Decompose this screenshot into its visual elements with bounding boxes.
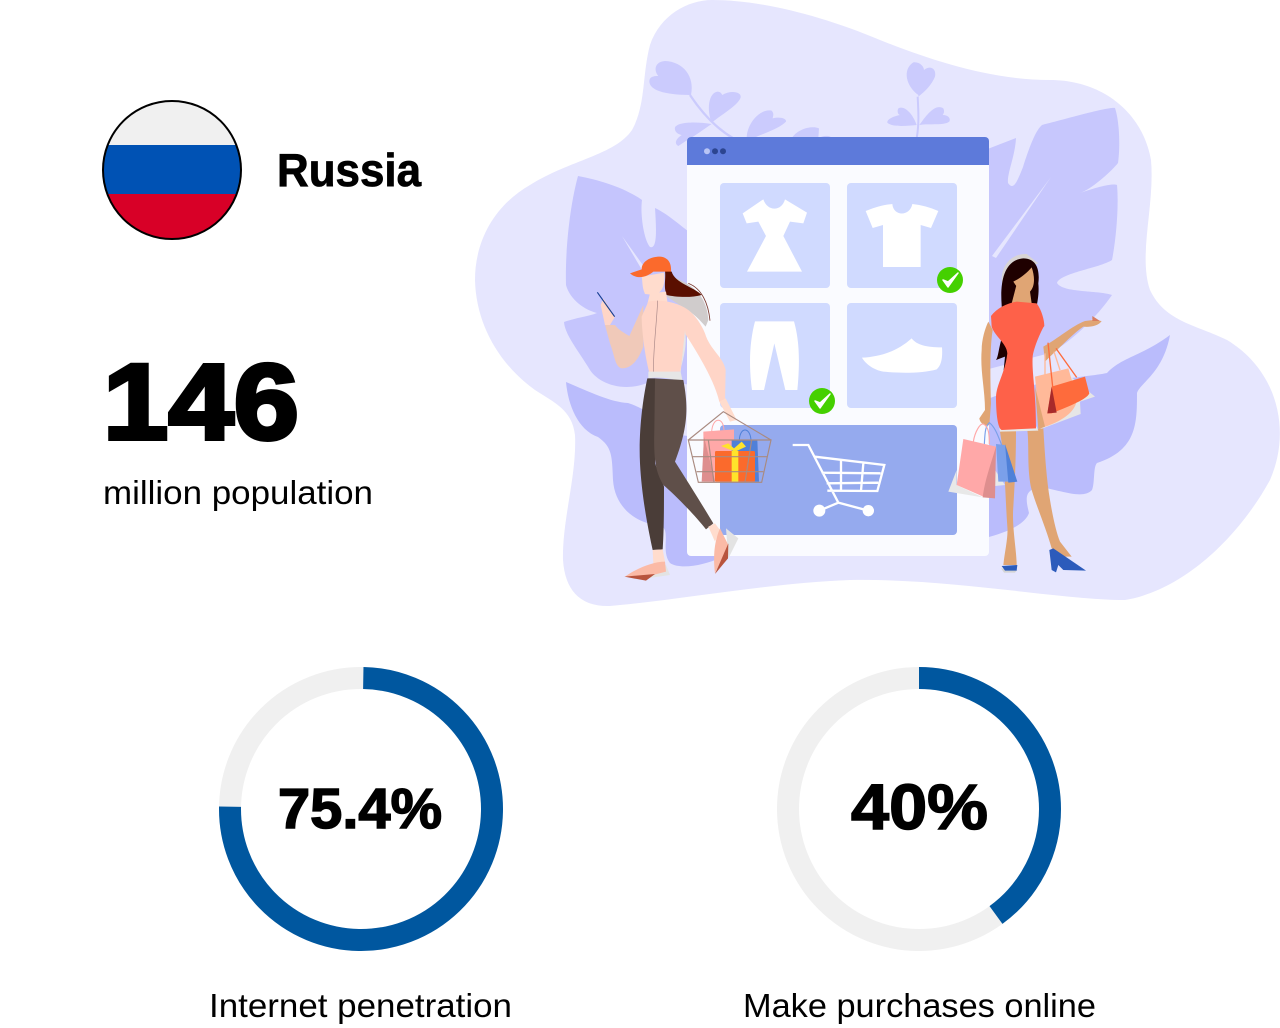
hair xyxy=(1001,258,1039,307)
left palm leaf xyxy=(564,176,700,387)
woman with basket xyxy=(597,257,771,581)
icon: check mark 2 xyxy=(809,388,835,414)
cap xyxy=(630,257,671,277)
heading: country name: Russia xyxy=(277,144,421,196)
product tile: dress xyxy=(720,183,830,288)
legs xyxy=(1000,431,1017,565)
basket contents xyxy=(703,429,734,482)
bags on right arm xyxy=(1040,373,1095,429)
browser window xyxy=(687,137,989,556)
donut value xyxy=(788,678,1050,940)
donut track xyxy=(230,678,492,940)
donut value xyxy=(228,676,494,942)
top plant left xyxy=(649,61,832,146)
shoes xyxy=(1001,568,1017,573)
product tile: shoe xyxy=(847,303,957,408)
front leg xyxy=(654,378,713,529)
window dots xyxy=(704,148,726,154)
top plant right xyxy=(887,62,950,138)
icon: shopping cart xyxy=(793,445,884,517)
cart tile xyxy=(720,425,957,535)
population stat xyxy=(103,341,373,511)
window body xyxy=(687,137,989,556)
basket xyxy=(688,412,771,482)
rear leg xyxy=(640,378,664,550)
population label: million population xyxy=(103,474,373,511)
neck xyxy=(647,292,667,304)
hand on basket xyxy=(719,398,737,422)
donut caption: Make purchases online xyxy=(743,987,1096,1024)
neck and face xyxy=(1012,282,1032,303)
donut caption: Internet penetration xyxy=(209,987,512,1024)
donut chart: internet penetration xyxy=(209,676,512,1024)
right palm leaf xyxy=(985,108,1119,370)
front foot xyxy=(708,523,720,542)
right lower leaf xyxy=(985,335,1170,538)
illustration: online shopping xyxy=(475,0,1280,606)
rear foot xyxy=(653,549,665,563)
headscarf xyxy=(1002,254,1038,290)
donut chart: make purchases online xyxy=(743,678,1096,1024)
donut percentage: 75.4% xyxy=(278,777,442,841)
scarf xyxy=(667,277,708,327)
product tile: t-shirt xyxy=(847,183,957,288)
right arm xyxy=(1043,320,1102,362)
left lower leaf xyxy=(566,382,720,566)
donut percentage: 40% xyxy=(851,771,988,843)
hand with phone xyxy=(601,298,615,325)
country header xyxy=(100,98,421,242)
torso xyxy=(642,301,726,402)
arm near xyxy=(605,305,643,368)
woman in red dress xyxy=(948,254,1102,573)
leaf veins xyxy=(622,177,1051,270)
dress xyxy=(999,427,1038,432)
hair xyxy=(665,271,702,297)
product tile: trousers xyxy=(720,303,830,408)
icon: check mark 1 xyxy=(937,267,963,293)
donut track xyxy=(788,678,1050,940)
left arm xyxy=(979,322,993,425)
face xyxy=(642,273,664,295)
left hand bags xyxy=(948,470,983,497)
background blob xyxy=(475,0,1280,606)
population number: 146 xyxy=(103,341,299,462)
waist xyxy=(648,330,686,382)
window title bar xyxy=(687,137,989,165)
icon: Russian flag xyxy=(100,98,244,242)
lower hair xyxy=(996,338,1010,373)
